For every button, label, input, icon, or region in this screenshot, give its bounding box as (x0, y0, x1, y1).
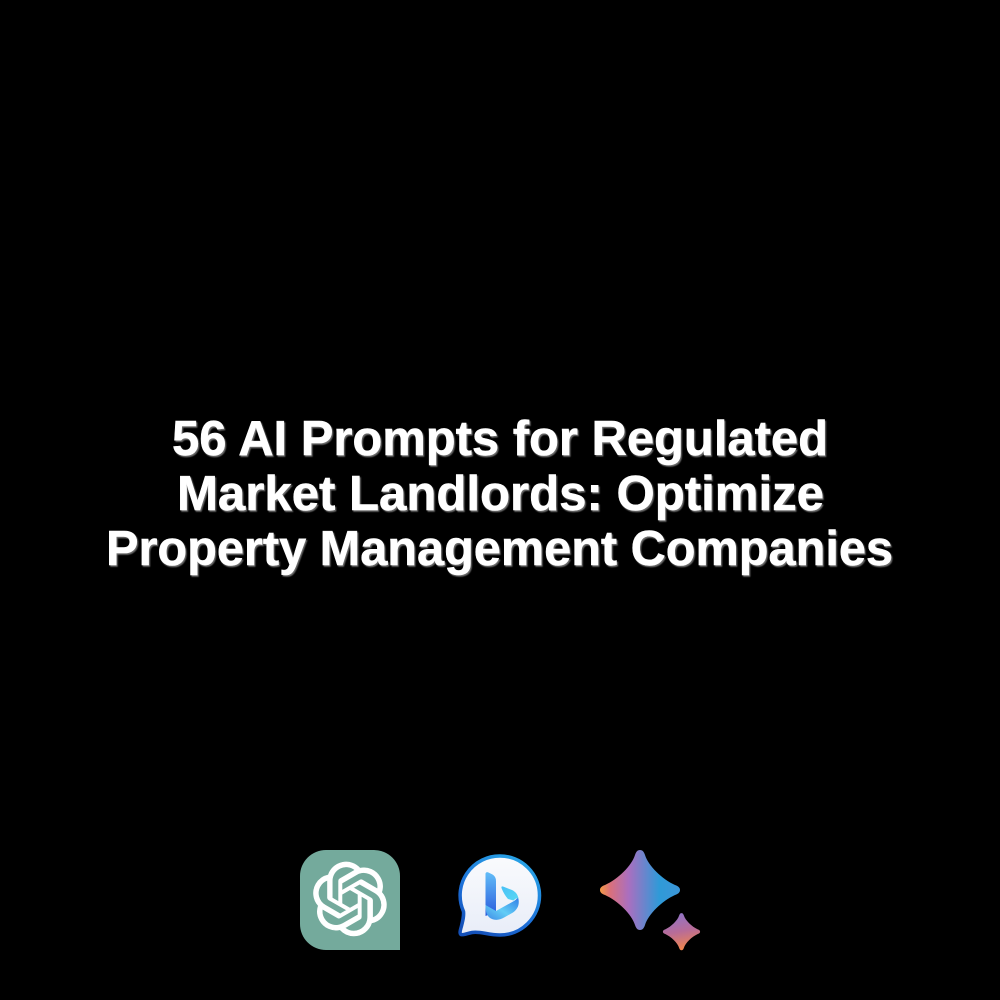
title: Property Management Companies (106, 522, 893, 576)
icon: Gemini sparkles (600, 850, 700, 950)
title (106, 412, 893, 576)
icon: small sparkle (663, 913, 700, 950)
icon: large sparkle (600, 850, 680, 930)
icon: Bing chat bubble (460, 856, 540, 935)
icon: ChatGPT logo (300, 850, 400, 950)
title: Market Landlords: Optimize (177, 467, 824, 521)
title: 56 AI Prompts for Regulated (172, 412, 828, 466)
